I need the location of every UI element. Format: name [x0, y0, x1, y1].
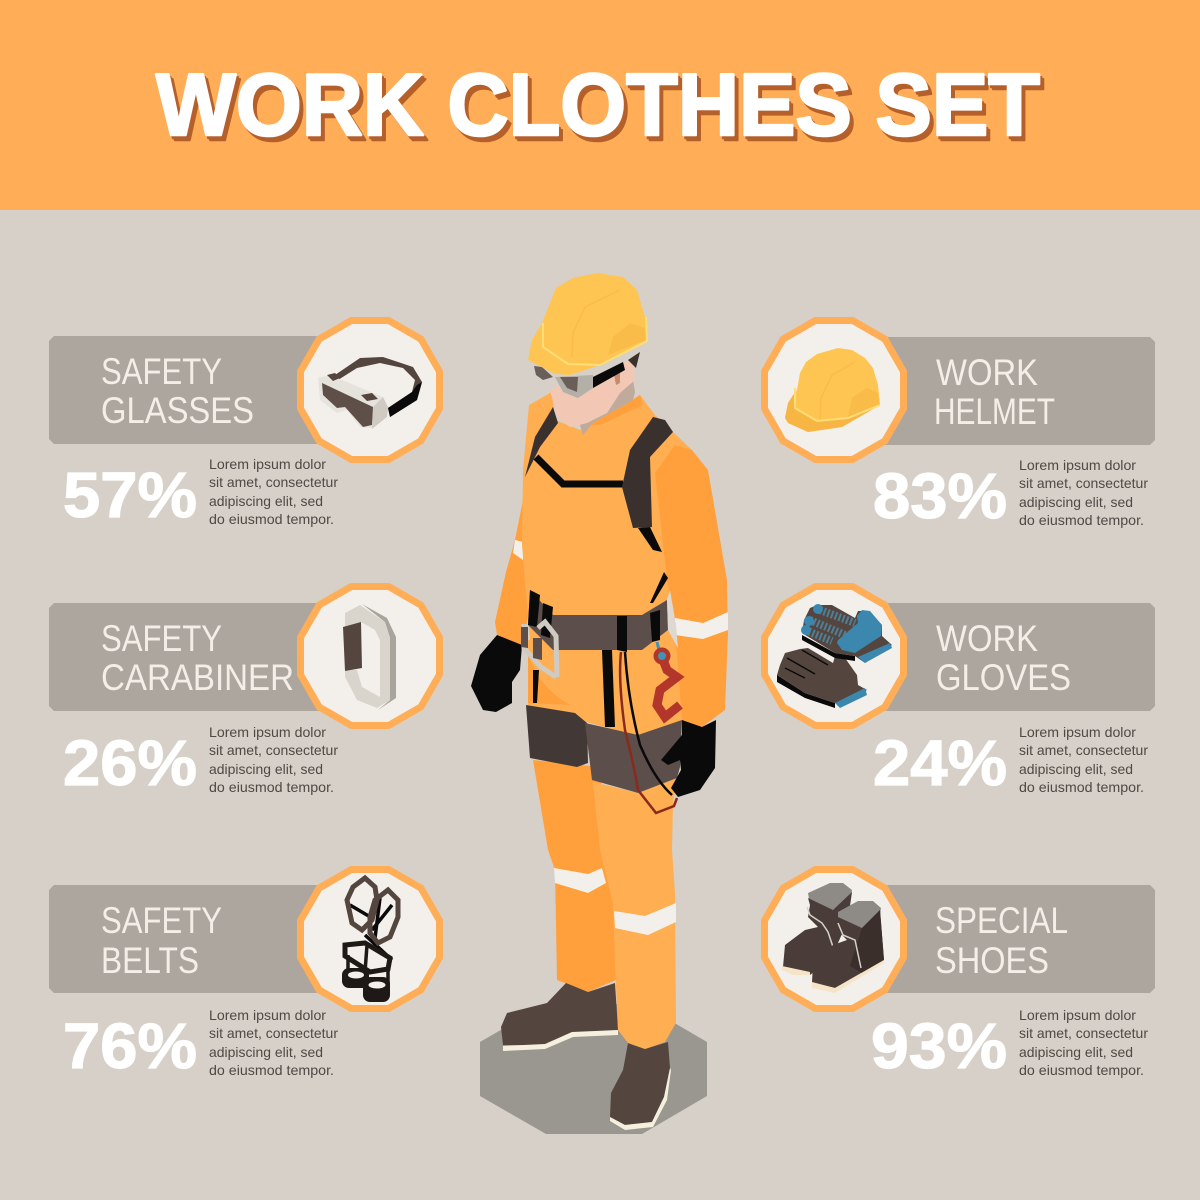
- description: [209, 456, 338, 527]
- description: do eiusmod tempor.: [209, 779, 334, 795]
- heading: SAFETY: [101, 351, 222, 392]
- description: adipiscing elit, sed: [1019, 761, 1133, 777]
- description: [1019, 724, 1148, 795]
- heading: [934, 352, 1055, 432]
- icon: harness: [342, 878, 398, 1002]
- worker figure: [471, 273, 728, 1130]
- percentage: 76%: [63, 1010, 197, 1082]
- title: WORK CLOTHES SET: [158, 58, 1042, 157]
- left leg reflector: [554, 868, 606, 893]
- title: WORK CLOTHES SET: [160, 60, 1044, 159]
- description: [209, 1007, 338, 1078]
- description: Lorem ipsum dolor: [209, 1007, 326, 1023]
- right glove: [661, 720, 716, 797]
- banner: [860, 337, 1155, 445]
- heading: WORK: [936, 352, 1038, 393]
- belt: [528, 590, 678, 652]
- description: Lorem ipsum dolor: [209, 456, 326, 472]
- percentage: 83%: [873, 460, 1007, 532]
- helmet: [528, 273, 647, 375]
- icon: back boot: [782, 883, 852, 975]
- description: Lorem ipsum dolor: [1019, 724, 1136, 740]
- heading: WORK: [936, 618, 1038, 659]
- left arm reflector: [513, 540, 523, 560]
- right arm: [655, 445, 728, 727]
- percentage: 24%: [873, 727, 1007, 799]
- left glove: [471, 635, 522, 712]
- heading: BELTS: [101, 940, 199, 981]
- panel: work gloves: [764, 586, 1155, 799]
- platform: [480, 1004, 707, 1134]
- banner: [49, 603, 330, 711]
- face: [550, 360, 635, 427]
- icon: helmet: [785, 348, 880, 432]
- description: sit amet, consectetur: [1019, 1025, 1148, 1041]
- right leg: [593, 778, 677, 1049]
- heading: HELMET: [934, 391, 1055, 432]
- icon badge: [764, 870, 904, 1008]
- heading: [101, 618, 294, 698]
- icon badge: [300, 320, 440, 460]
- description: adipiscing elit, sed: [209, 1044, 323, 1060]
- description: do eiusmod tempor.: [209, 511, 334, 527]
- description: [1019, 1007, 1148, 1078]
- description: do eiusmod tempor.: [209, 1062, 334, 1078]
- icon badge: [764, 586, 904, 726]
- heading: [935, 900, 1068, 981]
- heading: CARABINER: [101, 657, 294, 698]
- panel: special shoes: [764, 870, 1155, 1082]
- header band: [0, 0, 1200, 210]
- leg loops: [526, 705, 682, 793]
- heading: [936, 618, 1071, 698]
- description: sit amet, consectetur: [209, 1025, 338, 1041]
- icon: lower glove: [777, 648, 867, 708]
- heading: [101, 900, 222, 981]
- banner: [860, 603, 1155, 711]
- description: sit amet, consectetur: [1019, 475, 1148, 491]
- title: WORK CLOTHES SET: [156, 55, 1040, 154]
- heading: SAFETY: [101, 618, 222, 659]
- lanyards: [620, 652, 677, 813]
- description: adipiscing elit, sed: [1019, 1044, 1133, 1060]
- icon: goggles: [318, 357, 422, 429]
- description: Lorem ipsum dolor: [1019, 1007, 1136, 1023]
- banner: [49, 336, 330, 444]
- panel: work helmet: [764, 320, 1155, 532]
- lower torso: [528, 630, 682, 737]
- torso: [522, 392, 692, 640]
- description: sit amet, consectetur: [1019, 742, 1148, 758]
- description: do eiusmod tempor.: [1019, 1062, 1144, 1078]
- left arm: [495, 420, 534, 645]
- right arm reflector: [675, 612, 728, 639]
- description: sit amet, consectetur: [209, 474, 338, 490]
- heading: GLASSES: [101, 390, 254, 431]
- heading: SAFETY: [101, 900, 222, 941]
- icon badge: [300, 586, 440, 726]
- banner: [49, 885, 330, 993]
- description: [209, 724, 338, 795]
- icon: front boot: [812, 901, 884, 993]
- red hook: [654, 642, 680, 717]
- percentage: 57%: [63, 459, 197, 531]
- right leg reflector: [614, 903, 676, 935]
- description: sit amet, consectetur: [209, 742, 338, 758]
- percentage: 26%: [63, 727, 197, 799]
- icon: upper glove: [801, 604, 892, 663]
- description: Lorem ipsum dolor: [1019, 457, 1136, 473]
- right boot: [610, 1042, 671, 1130]
- left leg: [533, 760, 616, 992]
- left boot: [501, 983, 618, 1051]
- panel: safety glasses: [49, 320, 440, 531]
- description: do eiusmod tempor.: [1019, 779, 1144, 795]
- heading: SHOES: [935, 940, 1049, 981]
- description: do eiusmod tempor.: [1019, 512, 1144, 528]
- banner: [860, 885, 1155, 993]
- icon badge: [300, 870, 440, 1008]
- description: Lorem ipsum dolor: [209, 724, 326, 740]
- description: adipiscing elit, sed: [209, 493, 323, 509]
- carabiners on belt: [521, 622, 557, 677]
- description: adipiscing elit, sed: [1019, 494, 1133, 510]
- panel: safety carabiner: [49, 586, 440, 799]
- heading: [101, 351, 254, 431]
- icon badge: [764, 320, 904, 460]
- goggles: [534, 362, 625, 398]
- description: [1019, 457, 1148, 528]
- heading: SPECIAL: [935, 900, 1068, 941]
- heading: GLOVES: [936, 657, 1071, 698]
- panel: safety belts: [49, 870, 440, 1082]
- icon: carabiner: [343, 604, 396, 710]
- harness straps: [525, 407, 673, 727]
- hair and ear: [614, 352, 640, 385]
- neck and collar: [580, 380, 643, 435]
- percentage: 93%: [871, 1010, 1007, 1082]
- description: adipiscing elit, sed: [209, 761, 323, 777]
